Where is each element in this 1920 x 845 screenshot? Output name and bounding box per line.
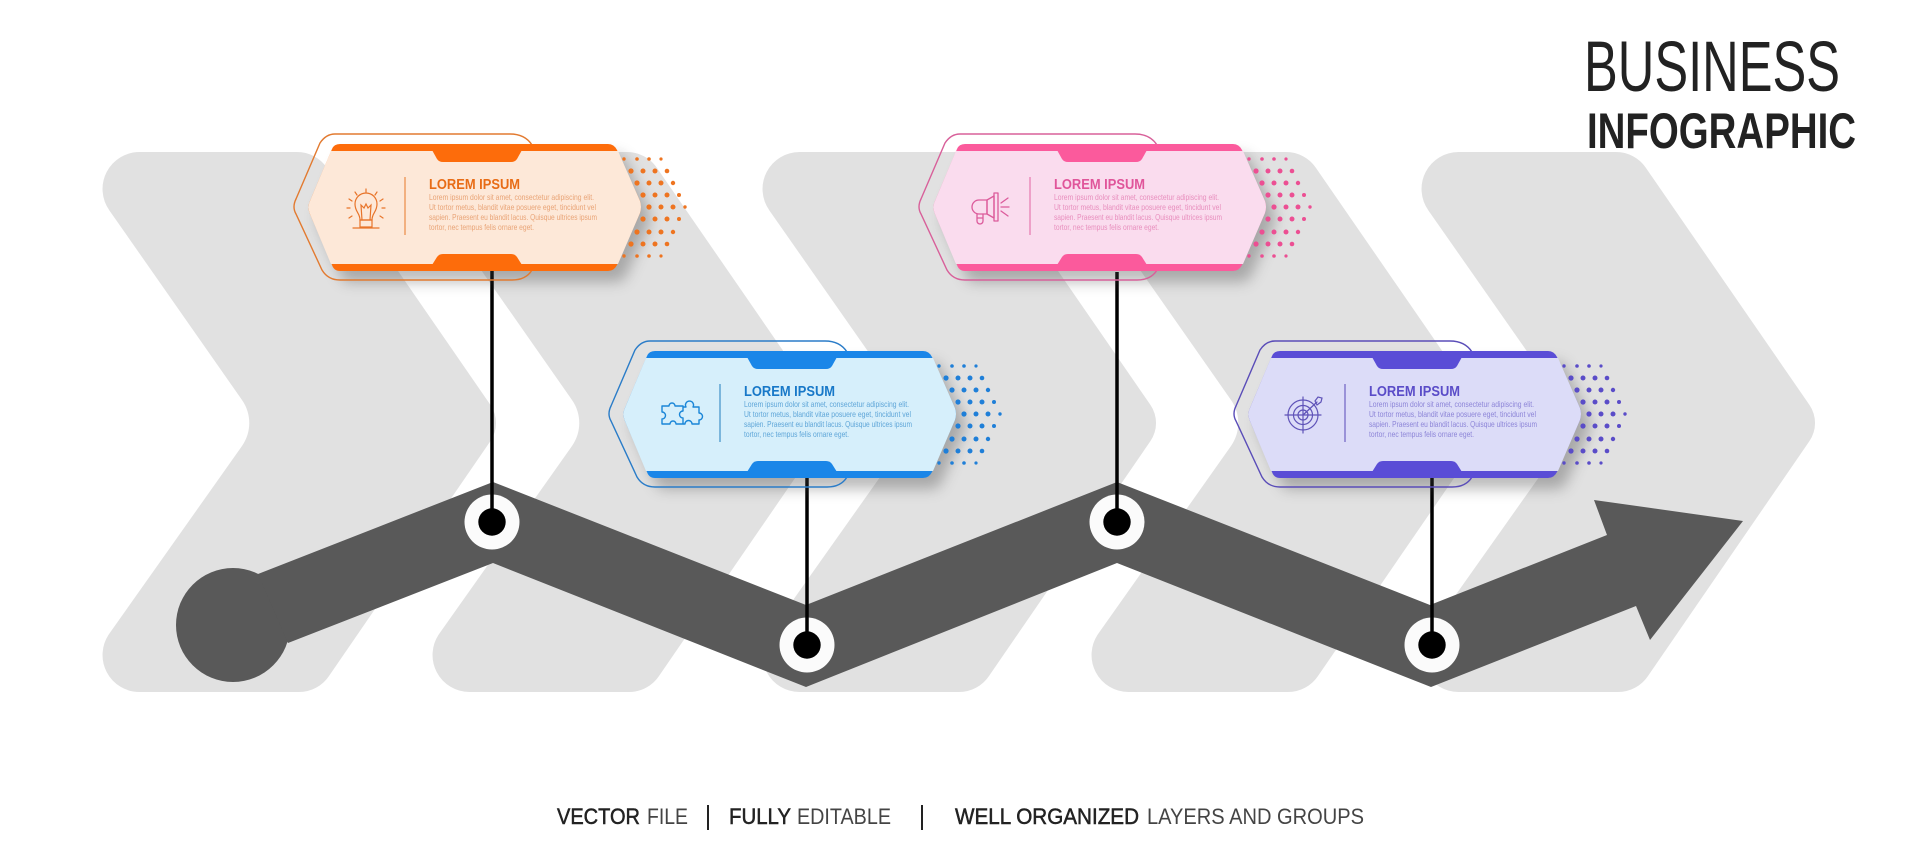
pin 3 (1090, 272, 1144, 550)
body text: tortor, nec tempus felis ornare eget. (429, 222, 534, 232)
footer caption: WELL ORGANIZED (955, 804, 1139, 829)
pin 1 (464, 270, 520, 550)
title (1584, 28, 1856, 159)
body text: Lorem ipsum dolor sit amet, consectetur adipiscing elit. (1369, 399, 1534, 409)
card outline (294, 134, 532, 280)
footer caption: FULLY (729, 804, 791, 829)
body text: tortor, nec tempus felis ornare eget. (744, 429, 849, 439)
panel: purple card (1234, 341, 1627, 489)
footer caption: EDITABLE (797, 804, 891, 829)
divider (1344, 384, 1346, 442)
card shadow (942, 155, 1275, 282)
heading: LOREM IPSUM (1054, 177, 1145, 193)
body text: Ut tortor metus, blandit vitae posuere eget, tincidunt vel (429, 202, 596, 212)
panel: orange card (294, 134, 687, 282)
heading: LOREM IPSUM (1369, 384, 1460, 400)
body text: sapien. Praesent eu blandit lacus. Quisque ultrices ipsum (429, 212, 597, 222)
card body (308, 151, 641, 264)
background chevrons (103, 152, 1815, 692)
card shadow (1258, 362, 1590, 489)
top tab (1372, 357, 1462, 369)
footer caption: VECTOR (557, 804, 640, 829)
card outline (1234, 341, 1472, 487)
footer caption: LAYERS AND GROUPS (1147, 804, 1364, 829)
icon: megaphone (972, 193, 1009, 224)
divider (719, 384, 721, 442)
body text: sapien. Praesent eu blandit lacus. Quisque ultrices ipsum (1369, 419, 1537, 429)
body text: sapien. Praesent eu blandit lacus. Quisque ultrices ipsum (744, 419, 912, 429)
body text (1369, 399, 1537, 439)
dot pattern (1562, 364, 1627, 465)
heading: LOREM IPSUM (429, 177, 520, 193)
body text: tortor, nec tempus felis ornare eget. (1054, 222, 1159, 232)
icon: puzzle (662, 401, 702, 424)
icon: light bulb (347, 189, 385, 228)
card band (624, 351, 956, 478)
pin 2 (780, 477, 834, 672)
top tab (432, 150, 522, 162)
bottom tab (1372, 461, 1462, 472)
panel: blue card (609, 341, 1002, 489)
footer caption (557, 804, 1364, 830)
bottom tab (747, 461, 837, 472)
body text: Lorem ipsum dolor sit amet, consectetur adipiscing elit. (429, 192, 594, 202)
dot pattern (622, 157, 687, 258)
divider (404, 177, 406, 235)
top tab (1057, 150, 1147, 162)
bottom tab (1057, 254, 1147, 265)
card band (1248, 351, 1581, 478)
body text: Lorem ipsum dolor sit amet, consectetur adipiscing elit. (744, 399, 909, 409)
card shadow (318, 155, 650, 282)
top tab (747, 357, 837, 369)
body text (429, 192, 597, 232)
body text: tortor, nec tempus felis ornare eget. (1369, 429, 1474, 439)
card body (934, 151, 1266, 264)
dot pattern (1247, 157, 1312, 258)
footer caption: FILE (647, 804, 688, 829)
card outline (609, 341, 847, 487)
zigzag arrow (176, 482, 1743, 687)
card band (934, 144, 1266, 271)
bottom tab (432, 254, 522, 265)
body text (1054, 192, 1222, 232)
card body (1248, 358, 1581, 471)
body text: Lorem ipsum dolor sit amet, consectetur adipiscing elit. (1054, 192, 1219, 202)
connector pins (464, 270, 1460, 672)
card shadow (632, 362, 965, 489)
card body (624, 358, 956, 471)
card band (308, 144, 641, 271)
card outline (919, 134, 1157, 280)
heading: LOREM IPSUM (744, 384, 835, 400)
body text: sapien. Praesent eu blandit lacus. Quisque ultrices ipsum (1054, 212, 1222, 222)
panel: pink card (919, 134, 1312, 282)
pin 4 (1404, 477, 1460, 672)
divider (1029, 177, 1031, 235)
body text: Ut tortor metus, blandit vitae posuere eget, tincidunt vel (1369, 409, 1536, 419)
body text (744, 399, 912, 439)
icon: target (1285, 397, 1322, 433)
body text: Ut tortor metus, blandit vitae posuere eget, tincidunt vel (744, 409, 911, 419)
body text: Ut tortor metus, blandit vitae posuere eget, tincidunt vel (1054, 202, 1221, 212)
dot pattern (937, 364, 1002, 465)
